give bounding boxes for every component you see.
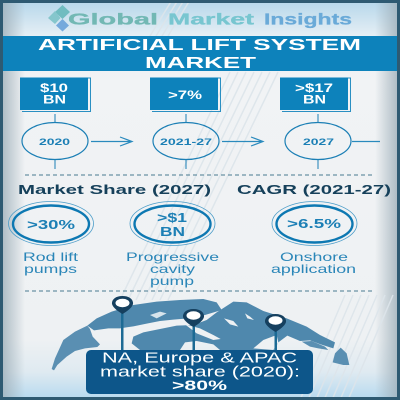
year node: 2021-27 (153, 122, 219, 160)
value box: $10 BN: BN (43, 92, 66, 106)
arrow (222, 137, 263, 146)
world map (52, 299, 349, 370)
stat: progressive cavity pump (126, 202, 219, 288)
logo wordmark: Insights (264, 12, 352, 28)
stat: progressive cavity pump: BN (160, 224, 185, 239)
year node: 2027 (285, 122, 351, 160)
timeline (20, 78, 380, 169)
heading: Market Share (2027): Market Share (2027) (18, 182, 211, 197)
value box: $10 BN (20, 78, 90, 112)
stat: progressive cavity pump: pump (150, 274, 194, 288)
title banner: MARKET (145, 55, 257, 72)
connector line (352, 140, 380, 142)
stat: rod lift pumps: >30% (27, 217, 76, 232)
stat: progressive cavity pump: >$1 (157, 210, 187, 225)
value box: >7%: >7% (168, 88, 202, 102)
value box: >7% (150, 78, 220, 112)
year node: 2020 (22, 122, 88, 160)
title banner: ARTIFICIAL LIFT SYSTEM (38, 37, 361, 54)
heading: CAGR (2021-27): CAGR (2021-27) (237, 182, 391, 197)
stat: onshore application: Onshore (280, 250, 348, 264)
callout: regional market share: >80% (172, 377, 228, 393)
logo wordmark (68, 12, 352, 28)
logo wordmark: Market (168, 12, 255, 28)
location pin 3 (265, 314, 286, 352)
logo wordmark: Global (68, 12, 158, 28)
value box: >$17 BN (280, 78, 350, 112)
callout: regional market share: market share (2020): (100, 364, 300, 380)
stat: rod lift pumps (8, 202, 94, 276)
year node: 2020: 2020 (39, 137, 70, 148)
value box: >$17 BN: >$17 (295, 81, 333, 95)
location pin 1 (112, 296, 133, 352)
stat: rod lift pumps: Rod lift (23, 250, 79, 264)
year node: 2021-27: 2021-27 (160, 137, 212, 148)
stat: onshore application: >6.5% (287, 216, 342, 231)
stat: rod lift pumps: pumps (24, 262, 77, 276)
title banner (3, 36, 397, 72)
stat: onshore application (271, 202, 357, 276)
stat: progressive cavity pump: cavity (150, 262, 195, 276)
arrow (91, 137, 132, 146)
year node: 2027: 2027 (303, 137, 334, 148)
stat: progressive cavity pump: Progressive (126, 250, 219, 264)
callout: regional market share (86, 350, 313, 394)
value box: $10 BN: $10 (40, 81, 68, 95)
stat: onshore application: application (271, 262, 356, 276)
value box: >$17 BN: BN (303, 92, 326, 106)
location pin 2 (183, 309, 204, 352)
logo: Global Market Insights (48, 5, 352, 32)
icon: logo diamonds (48, 5, 70, 32)
callout: regional market share: NA, Europe & APAC (102, 350, 297, 366)
